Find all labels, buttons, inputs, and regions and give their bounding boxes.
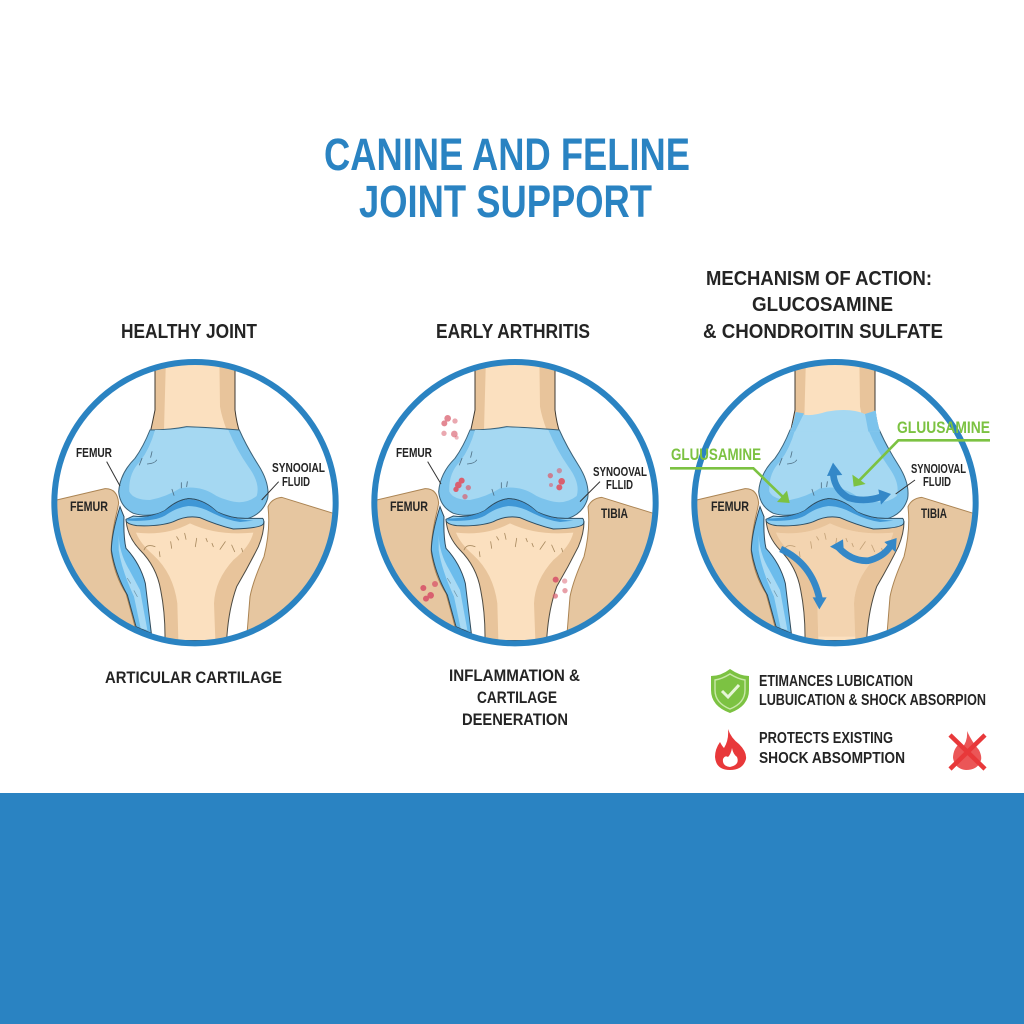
caption: inflammation and cartilage degeneration: INFLAMMATION & [449,666,580,685]
icon: crossed out flame [950,731,985,770]
title [324,129,690,227]
diagram: mechanism of action: TIBIA [921,505,947,521]
icon: green shield with check [711,669,749,713]
caption: inflammation and cartilage degeneration: CARTILAGE [477,688,557,707]
benefit text: lubrication [759,673,986,709]
diagram: mechanism of action: FLUID [923,474,951,489]
panel: healthy joint [40,321,350,687]
diagram: healthy joint: SYNOOIAL [272,460,325,475]
bottom blue band [0,793,1024,1024]
diagram: early arthritis: FEMUR [396,445,432,460]
arrow: glucosamine right [852,440,990,487]
benefit text: protects existing [759,730,905,767]
caption: articular cartilage: ARTICULAR CARTILAGE [105,668,282,687]
diagram: mechanism of action: GLUUSAMINE [897,418,990,437]
diagram: mechanism of action: FEMUR [711,498,749,514]
arrow: glucosamine left [670,468,790,503]
benefit text: protects existing: PROTECTS EXISTING [759,730,893,747]
heading: mechanism of action: MECHANISM OF ACTION: [706,268,932,290]
heading: early arthritis: EARLY ARTHRITIS [436,321,590,343]
inflammation spots [420,415,568,602]
caption: inflammation and cartilage degeneration [449,666,580,729]
diagram: mechanism of action: SYNOIOVAL [911,461,966,476]
icon: red flame [715,729,746,770]
heading: mechanism of action: & CHONDROITIN SULFATE [703,321,943,343]
title: CANINE AND FELINE [324,129,690,180]
panel: mechanism of action [670,268,990,770]
heading: mechanism of action: GLUCOSAMINE [752,294,893,316]
diagram: mechanism of action [670,350,990,650]
arrow: upward and right flow [827,463,891,505]
benefit text: lubrication: ETIMANCES LUBICATION [759,673,913,690]
heading: healthy joint: HEALTHY JOINT [121,321,257,343]
benefit text: protects existing: SHOCK ABSOMPTION [759,750,905,767]
diagram: healthy joint: FEMUR [76,445,112,460]
diagram: early arthritis: TIBIA [601,505,628,521]
heading: mechanism of action [703,268,943,343]
caption: inflammation and cartilage degeneration: DEENERATION [462,710,568,729]
diagram: early arthritis: FEMUR [390,498,428,514]
diagram: early arthritis [360,350,670,650]
arrow: tibia circular flow [830,538,897,561]
panel: early arthritis [360,321,670,729]
title: JOINT SUPPORT [359,176,652,227]
diagram: healthy joint [40,350,350,650]
background [0,0,1024,793]
diagram: early arthritis: FLLID [606,477,633,492]
arrow: tibia downward flow [781,549,827,609]
diagram: mechanism of action: GLUUSAMINE [671,445,761,464]
diagram: healthy joint: FEMUR [70,498,108,514]
benefits list [711,669,986,770]
diagram: healthy joint: FLUID [282,474,310,489]
diagram: early arthritis: SYNOOVAL [593,464,647,479]
leader: synovial fluid [896,480,915,494]
